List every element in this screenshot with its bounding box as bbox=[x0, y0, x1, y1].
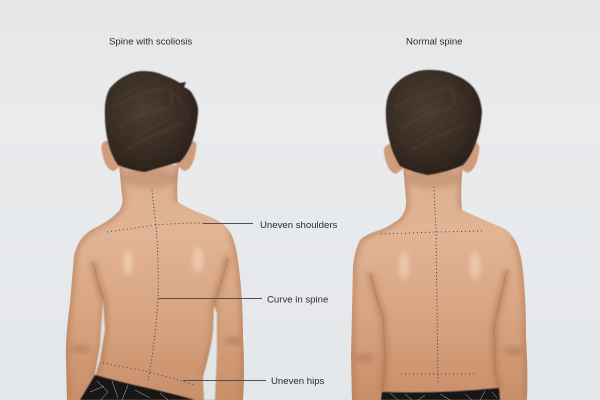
arm gaps bbox=[94, 301, 106, 377]
ears bbox=[102, 141, 196, 171]
shorts bbox=[381, 388, 500, 400]
shorts bbox=[80, 375, 195, 400]
ears bbox=[384, 142, 479, 174]
dotted line: level hips bbox=[401, 373, 476, 375]
body bbox=[345, 160, 535, 400]
heading: spine with scoliosis: Spine with scoliosis bbox=[109, 36, 192, 48]
shading and highlights bbox=[351, 165, 527, 400]
figure: boy with normal spine bbox=[345, 70, 535, 400]
callout: uneven shoulders: Uneven shoulders bbox=[260, 220, 338, 231]
dotted line: straight spine bbox=[434, 187, 438, 382]
heading: normal spine: Normal spine bbox=[406, 36, 463, 48]
body bbox=[60, 160, 250, 400]
shading and highlights bbox=[66, 165, 244, 400]
callout: uneven hips: Uneven hips bbox=[271, 376, 325, 387]
callout: uneven shoulders bbox=[203, 220, 338, 231]
dotted line: level shoulders bbox=[381, 231, 485, 234]
figure: boy with scoliosis bbox=[60, 71, 250, 400]
dotted line: uneven hips bbox=[103, 363, 195, 385]
dotted line: uneven shoulders bbox=[107, 223, 205, 232]
hair bbox=[386, 70, 482, 175]
callout: curve in spine: Curve in spine bbox=[267, 294, 328, 306]
hair bbox=[105, 71, 198, 172]
dotted line: curved spine bbox=[148, 190, 158, 380]
